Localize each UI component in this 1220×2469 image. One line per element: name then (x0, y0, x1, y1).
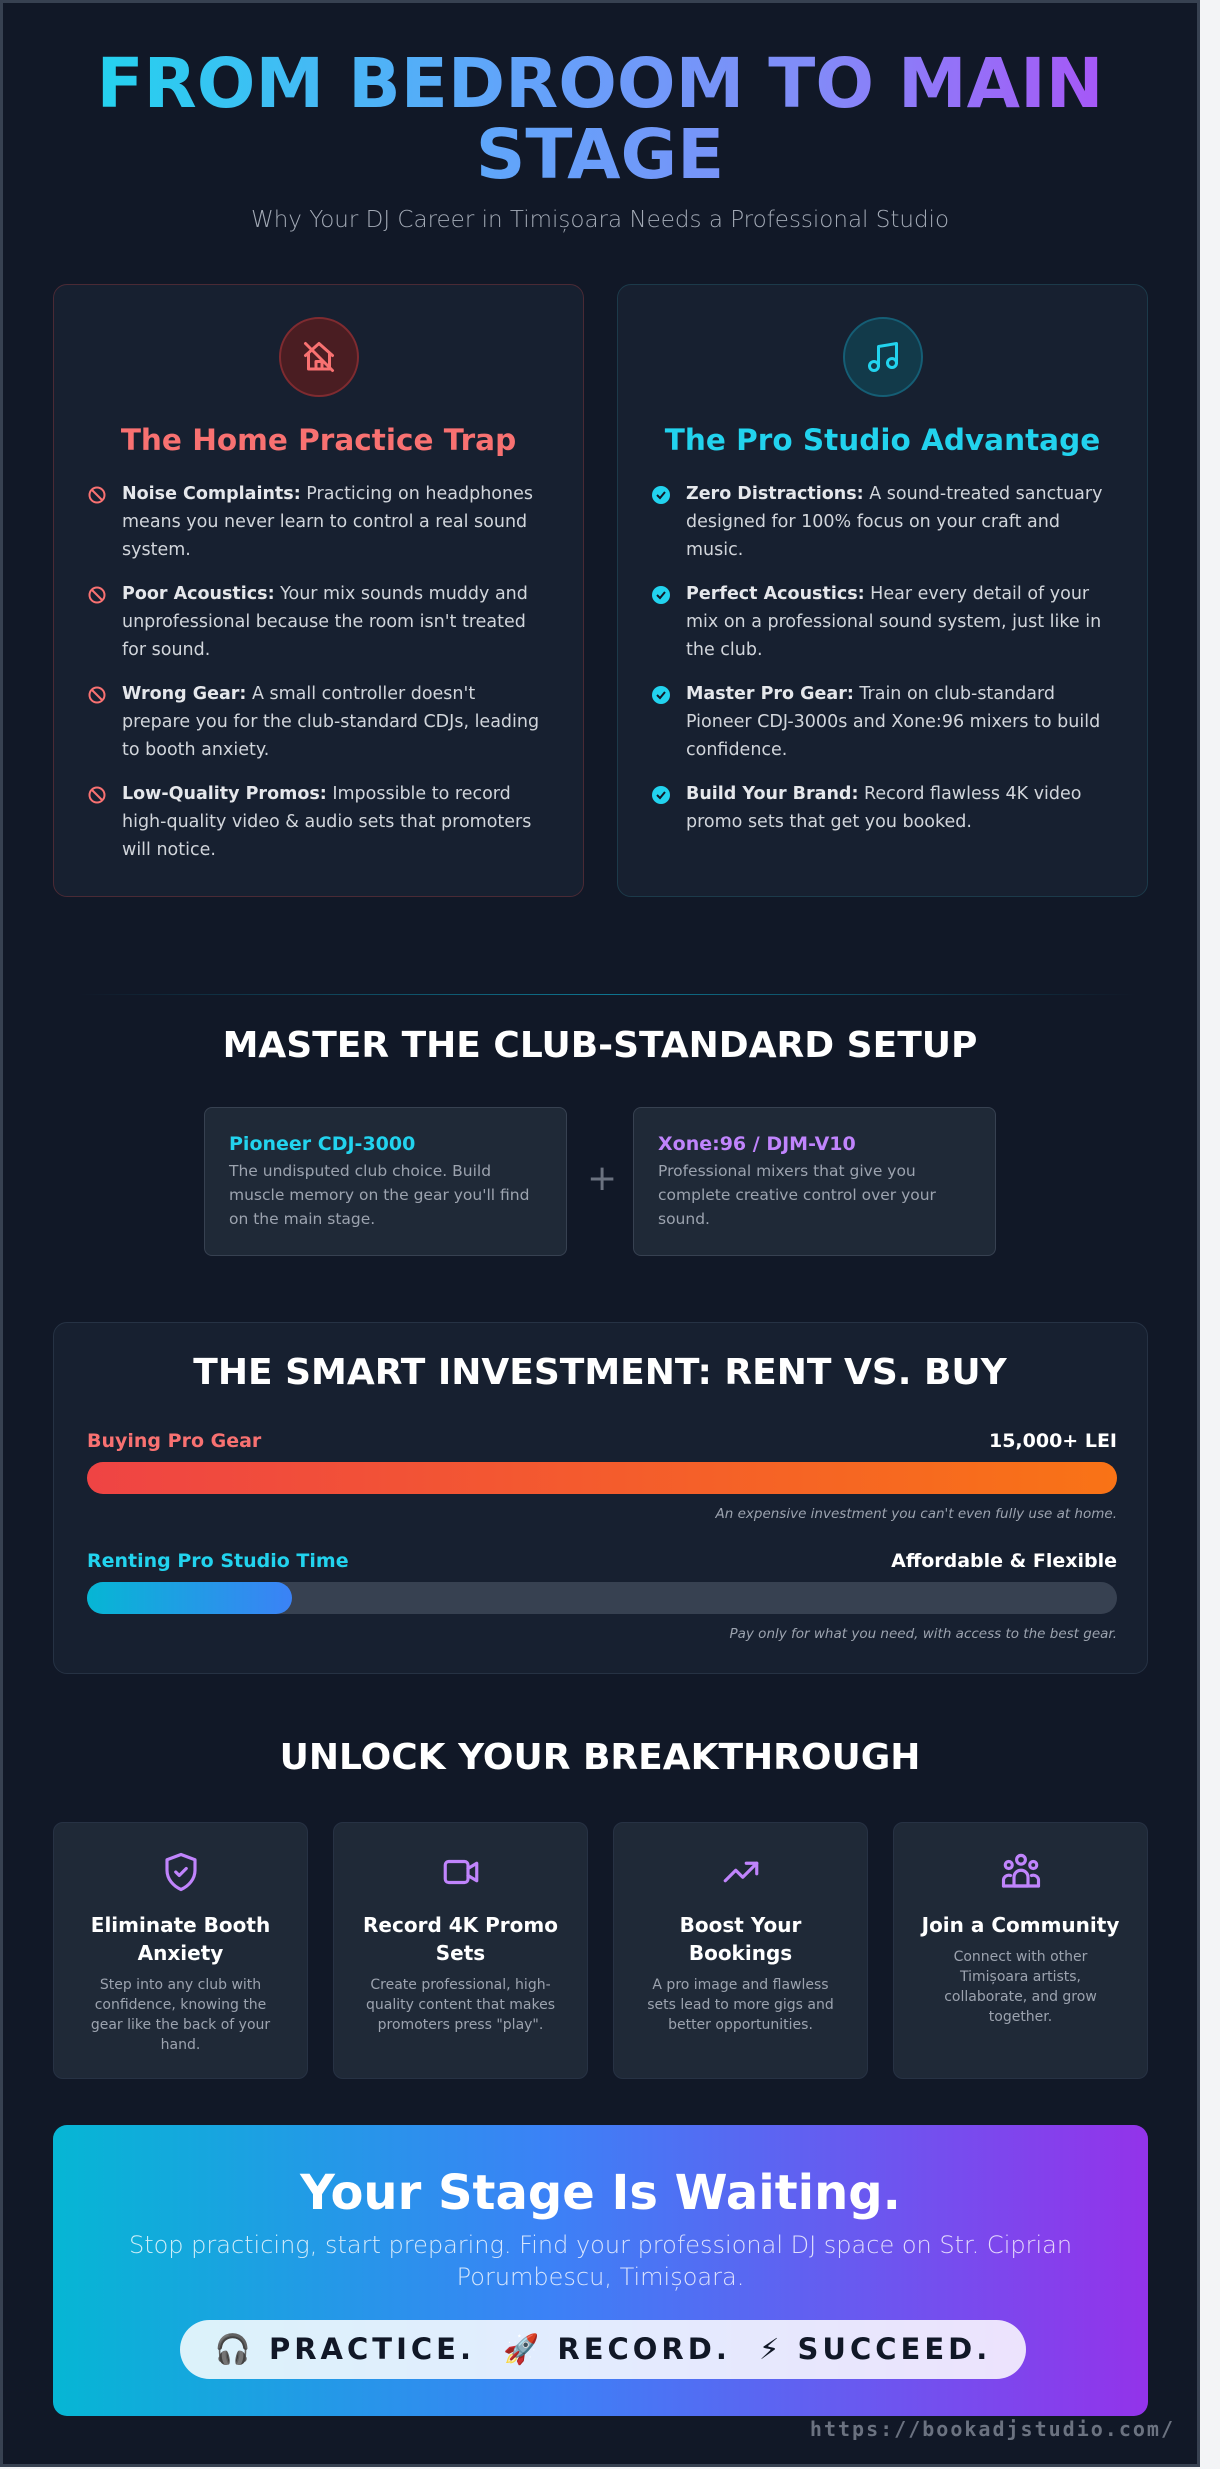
text: An expensive investment you can't even fully use at home. (716, 1506, 1117, 1522)
CTA heading: Your Stage Is Waiting. (300, 2165, 901, 2221)
list: advantages: Zero Distractions: A sound-treated sanctuary designed for 100% focus on your craft and music. (686, 484, 1102, 560)
list: problems: Noise Complaints: Practicing on headphones means you never learn to control a real sound system. (122, 484, 533, 560)
list: problems: Low-Quality Promos: Impossible to record high-quality video & audio sets that promoters will notice. (122, 784, 531, 860)
panel: pro studio advantage (617, 284, 1148, 897)
gear card: CDJ: The undisputed club choice. Build muscle memory on the gear you'll find on the main stage. (229, 1162, 529, 1228)
gear card: mixer: Xone:96 / DJM-V10 (658, 1133, 856, 1155)
heading: master setup: MASTER THE CLUB-STANDARD SETUP (223, 1025, 977, 1066)
pill: slogan (180, 2320, 1026, 2379)
panel: rent vs buy (53, 1322, 1148, 1674)
text: Buying Pro Gear (87, 1430, 261, 1452)
pill: slogan: 🎧 PRACTICE. 🚀 RECORD. ⚡ SUCCEED. (215, 2332, 991, 2366)
gear card: mixer: Professional mixers that give you complete creative control over your sound. (658, 1162, 936, 1228)
title: FROM BEDROOM TO MAIN (97, 44, 1103, 124)
title (83, 49, 1117, 191)
benefit: community: Connect with other Timișoara artists, collaborate, and grow together. (944, 1949, 1097, 2025)
gear card: CDJ: Pioneer CDJ-3000 (229, 1133, 415, 1155)
icon: house (279, 317, 359, 397)
benefit: booth anxiety: Step into any club with confidence, knowing the gear like the back of your hand. (91, 1977, 270, 2053)
benefit: bookings (613, 1822, 868, 2079)
panel: home practice trap (53, 284, 584, 897)
text: 15,000+ LEI (989, 1430, 1117, 1452)
text: Affordable & Flexible (891, 1550, 1117, 1572)
text: Renting Pro Studio Time (87, 1550, 349, 1572)
CTA text: Stop practicing, start preparing. Find your professional DJ space on Str. Ciprian Porumbescu, Timișoara. (129, 2231, 1072, 2291)
benefit: bookings: A pro image and flawless sets lead to more gigs and better opportunities. (647, 1977, 834, 2033)
url: https://bookadjstudio.com/ (810, 2417, 1175, 2441)
benefit: community (893, 1822, 1148, 2079)
list: advantages: Build Your Brand: Record flawless 4K video promo sets that get you booked. (686, 784, 1082, 832)
icon: music note (843, 317, 923, 397)
subtitle: Why Your DJ Career in Timișoara Needs a Professional Studio (251, 207, 949, 233)
benefit: community: Join a Community (922, 1913, 1119, 1937)
title: STAGE (476, 115, 724, 195)
list: advantages: Master Pro Gear: Train on club-standard Pioneer CDJ-3000s and Xone:96 mixers to build confidence. (686, 684, 1100, 760)
heading: The Pro Studio Advantage (665, 423, 1100, 457)
heading: The Home Practice Trap (121, 423, 516, 457)
list: problems: Poor Acoustics: Your mix sounds muddy and unprofessional because the room isn't treated for sound. (122, 584, 528, 660)
benefit: booth anxiety: Eliminate Booth Anxiety (91, 1913, 270, 1965)
bar: renting (87, 1550, 1117, 1642)
list: advantages (652, 484, 1102, 832)
benefit: bookings: Boost Your Bookings (680, 1913, 801, 1965)
gear card: CDJ (204, 1107, 567, 1256)
benefit: 4K promo: Create professional, high-quality content that makes promoters press "play". (366, 1977, 555, 2033)
icon: plus: + (587, 1158, 617, 1199)
heading: breakthrough: UNLOCK YOUR BREAKTHROUGH (280, 1737, 920, 1778)
list: problems (88, 484, 539, 860)
list: advantages: Perfect Acoustics: Hear every detail of your mix on a professional sound system, just like in the club. (686, 584, 1101, 660)
text: Pay only for what you need, with access to the best gear. (729, 1626, 1117, 1642)
list: problems: Wrong Gear: A small controller doesn't prepare you for the club-standard CDJs, leading to booth anxiety. (122, 684, 539, 760)
callout: CTA (53, 2125, 1148, 2416)
heading: smart investment: THE SMART INVESTMENT: RENT VS. BUY (193, 1352, 1007, 1393)
benefit: 4K promo (333, 1822, 588, 2079)
benefit: 4K promo: Record 4K Promo Sets (363, 1913, 558, 1965)
benefit: booth anxiety (53, 1822, 308, 2079)
bar: buying (87, 1430, 1117, 1522)
gear card: mixer (633, 1107, 996, 1256)
